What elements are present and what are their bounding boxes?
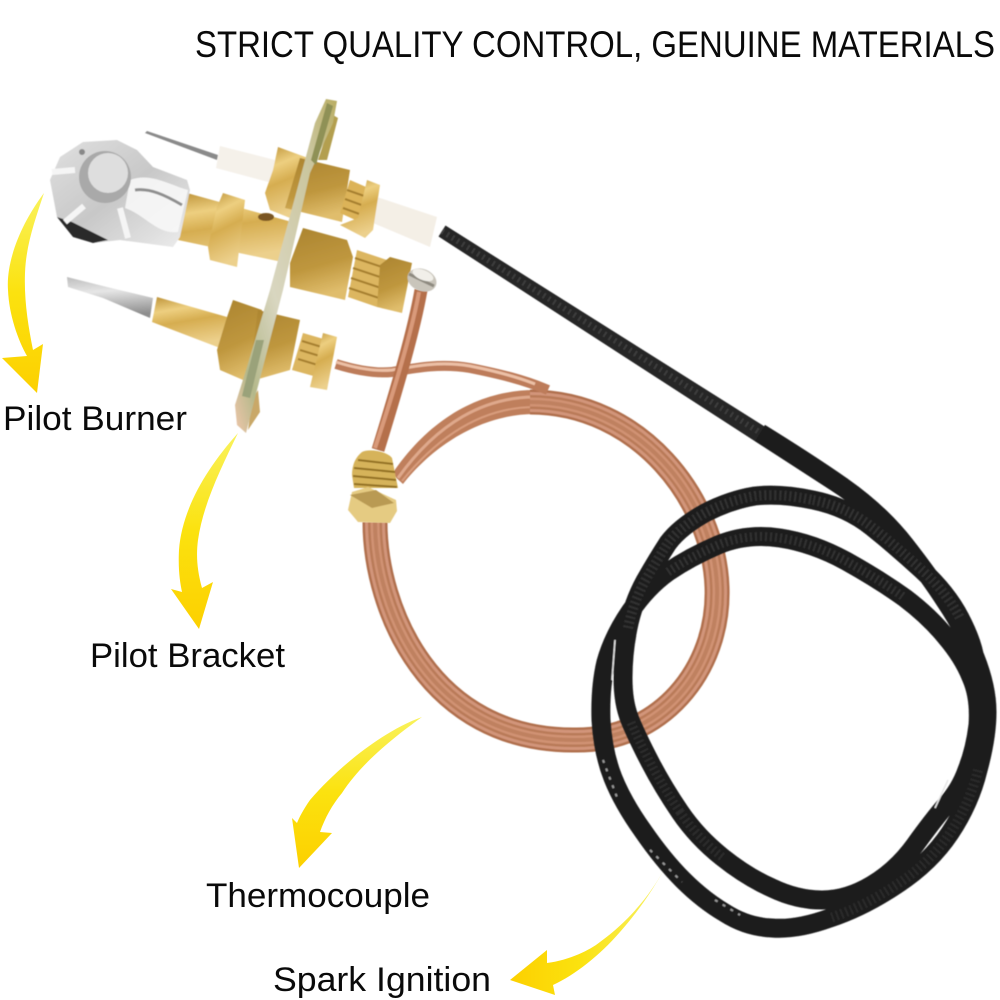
arrow to Pilot Burner [2,193,44,393]
arrow to Thermocouple [292,717,422,868]
label: Pilot Burner: Pilot Burner [3,400,187,438]
label: Thermocouple: Thermocouple [206,877,430,915]
black spark ignition cable [438,226,987,928]
thermocouple connection washer [404,264,440,296]
burner side port [258,213,274,221]
igniter upper brass nuts [265,147,380,238]
threaded brass tube fitting [348,450,398,523]
ceramic igniter front [373,197,437,247]
thermocouple probe [67,277,153,318]
pilot assembly [50,99,440,433]
burner tube nut [208,193,245,267]
arrow to Pilot Bracket [171,433,238,629]
burner tube [178,193,292,262]
ceramic igniter rear [216,146,275,183]
pilot bracket plate [235,99,338,433]
copper thermocouple coil [336,290,717,740]
thermocouple brass nuts [217,300,337,390]
label: Pilot Bracket: Pilot Bracket [90,637,286,675]
label: Spark Ignition: Spark Ignition [273,961,491,999]
arrow to Spark Ignition [510,868,665,995]
thermocouple brass cylinder [152,297,227,348]
burner rear body [290,228,412,313]
silver pilot burner hood [50,140,190,247]
igniter electrode pin [145,131,218,160]
